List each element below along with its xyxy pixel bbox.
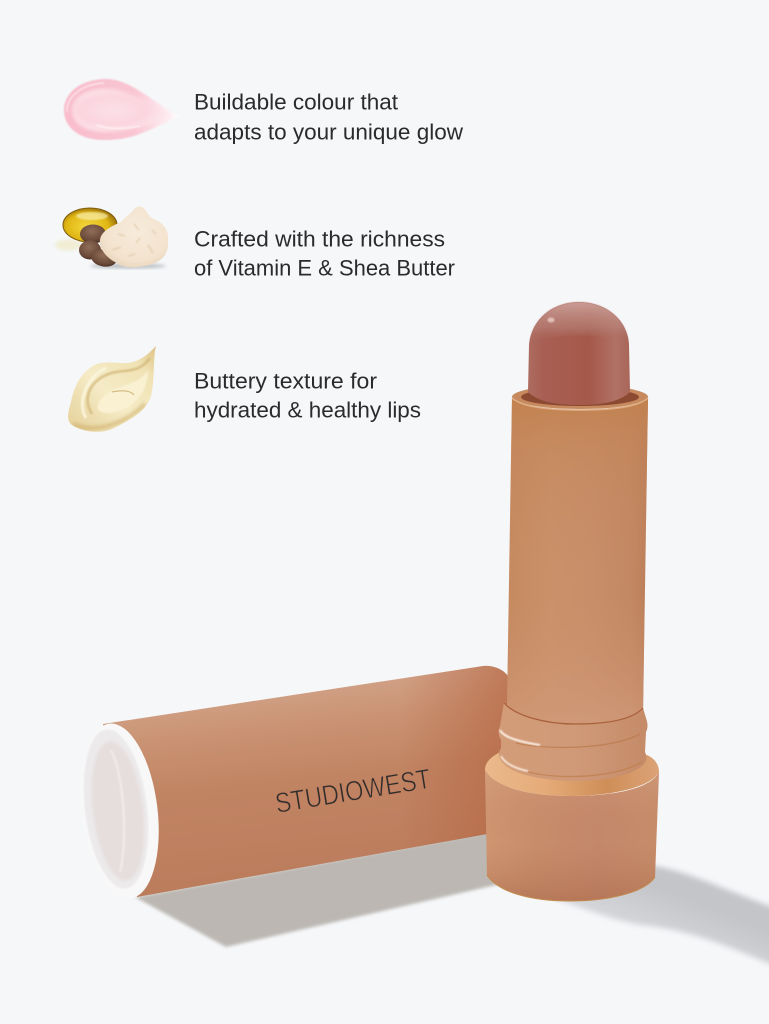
tube rim back <box>512 385 648 409</box>
brand logo: STUDIOWEST <box>273 763 433 819</box>
text: buildable colour <box>194 90 463 144</box>
neck rings <box>499 702 648 781</box>
base top ledge <box>485 752 659 796</box>
text: buttery texture <box>194 368 421 422</box>
text: vitamin E and shea butter: of Vitamin E & Shea Butter <box>194 256 455 280</box>
text: vitamin E and shea butter <box>194 226 455 280</box>
icon: pink gloss swatch <box>64 79 180 140</box>
cap body <box>103 666 510 897</box>
text: buildable colour: adapts to your unique glow <box>194 120 463 144</box>
text: buttery texture: Buttery texture for <box>194 368 377 394</box>
shadow: lipstick cast shadow <box>530 866 769 966</box>
icon: vitamin E capsule, shea nuts and butter <box>55 207 168 269</box>
icon: butter cream swatch <box>68 346 156 432</box>
lipstick stick <box>485 302 659 901</box>
lipstick cap <box>72 666 510 903</box>
tube body <box>507 398 648 726</box>
text: buttery texture: hydrated & healthy lips <box>194 398 421 422</box>
text: buildable colour: Buildable colour that <box>194 90 398 114</box>
base body <box>485 770 659 901</box>
cap open rim <box>72 719 168 903</box>
text: vitamin E and shea butter: Crafted with the richness <box>194 226 445 252</box>
shadow: cap cast shadow <box>135 830 500 947</box>
lipstick bullet <box>528 302 630 405</box>
